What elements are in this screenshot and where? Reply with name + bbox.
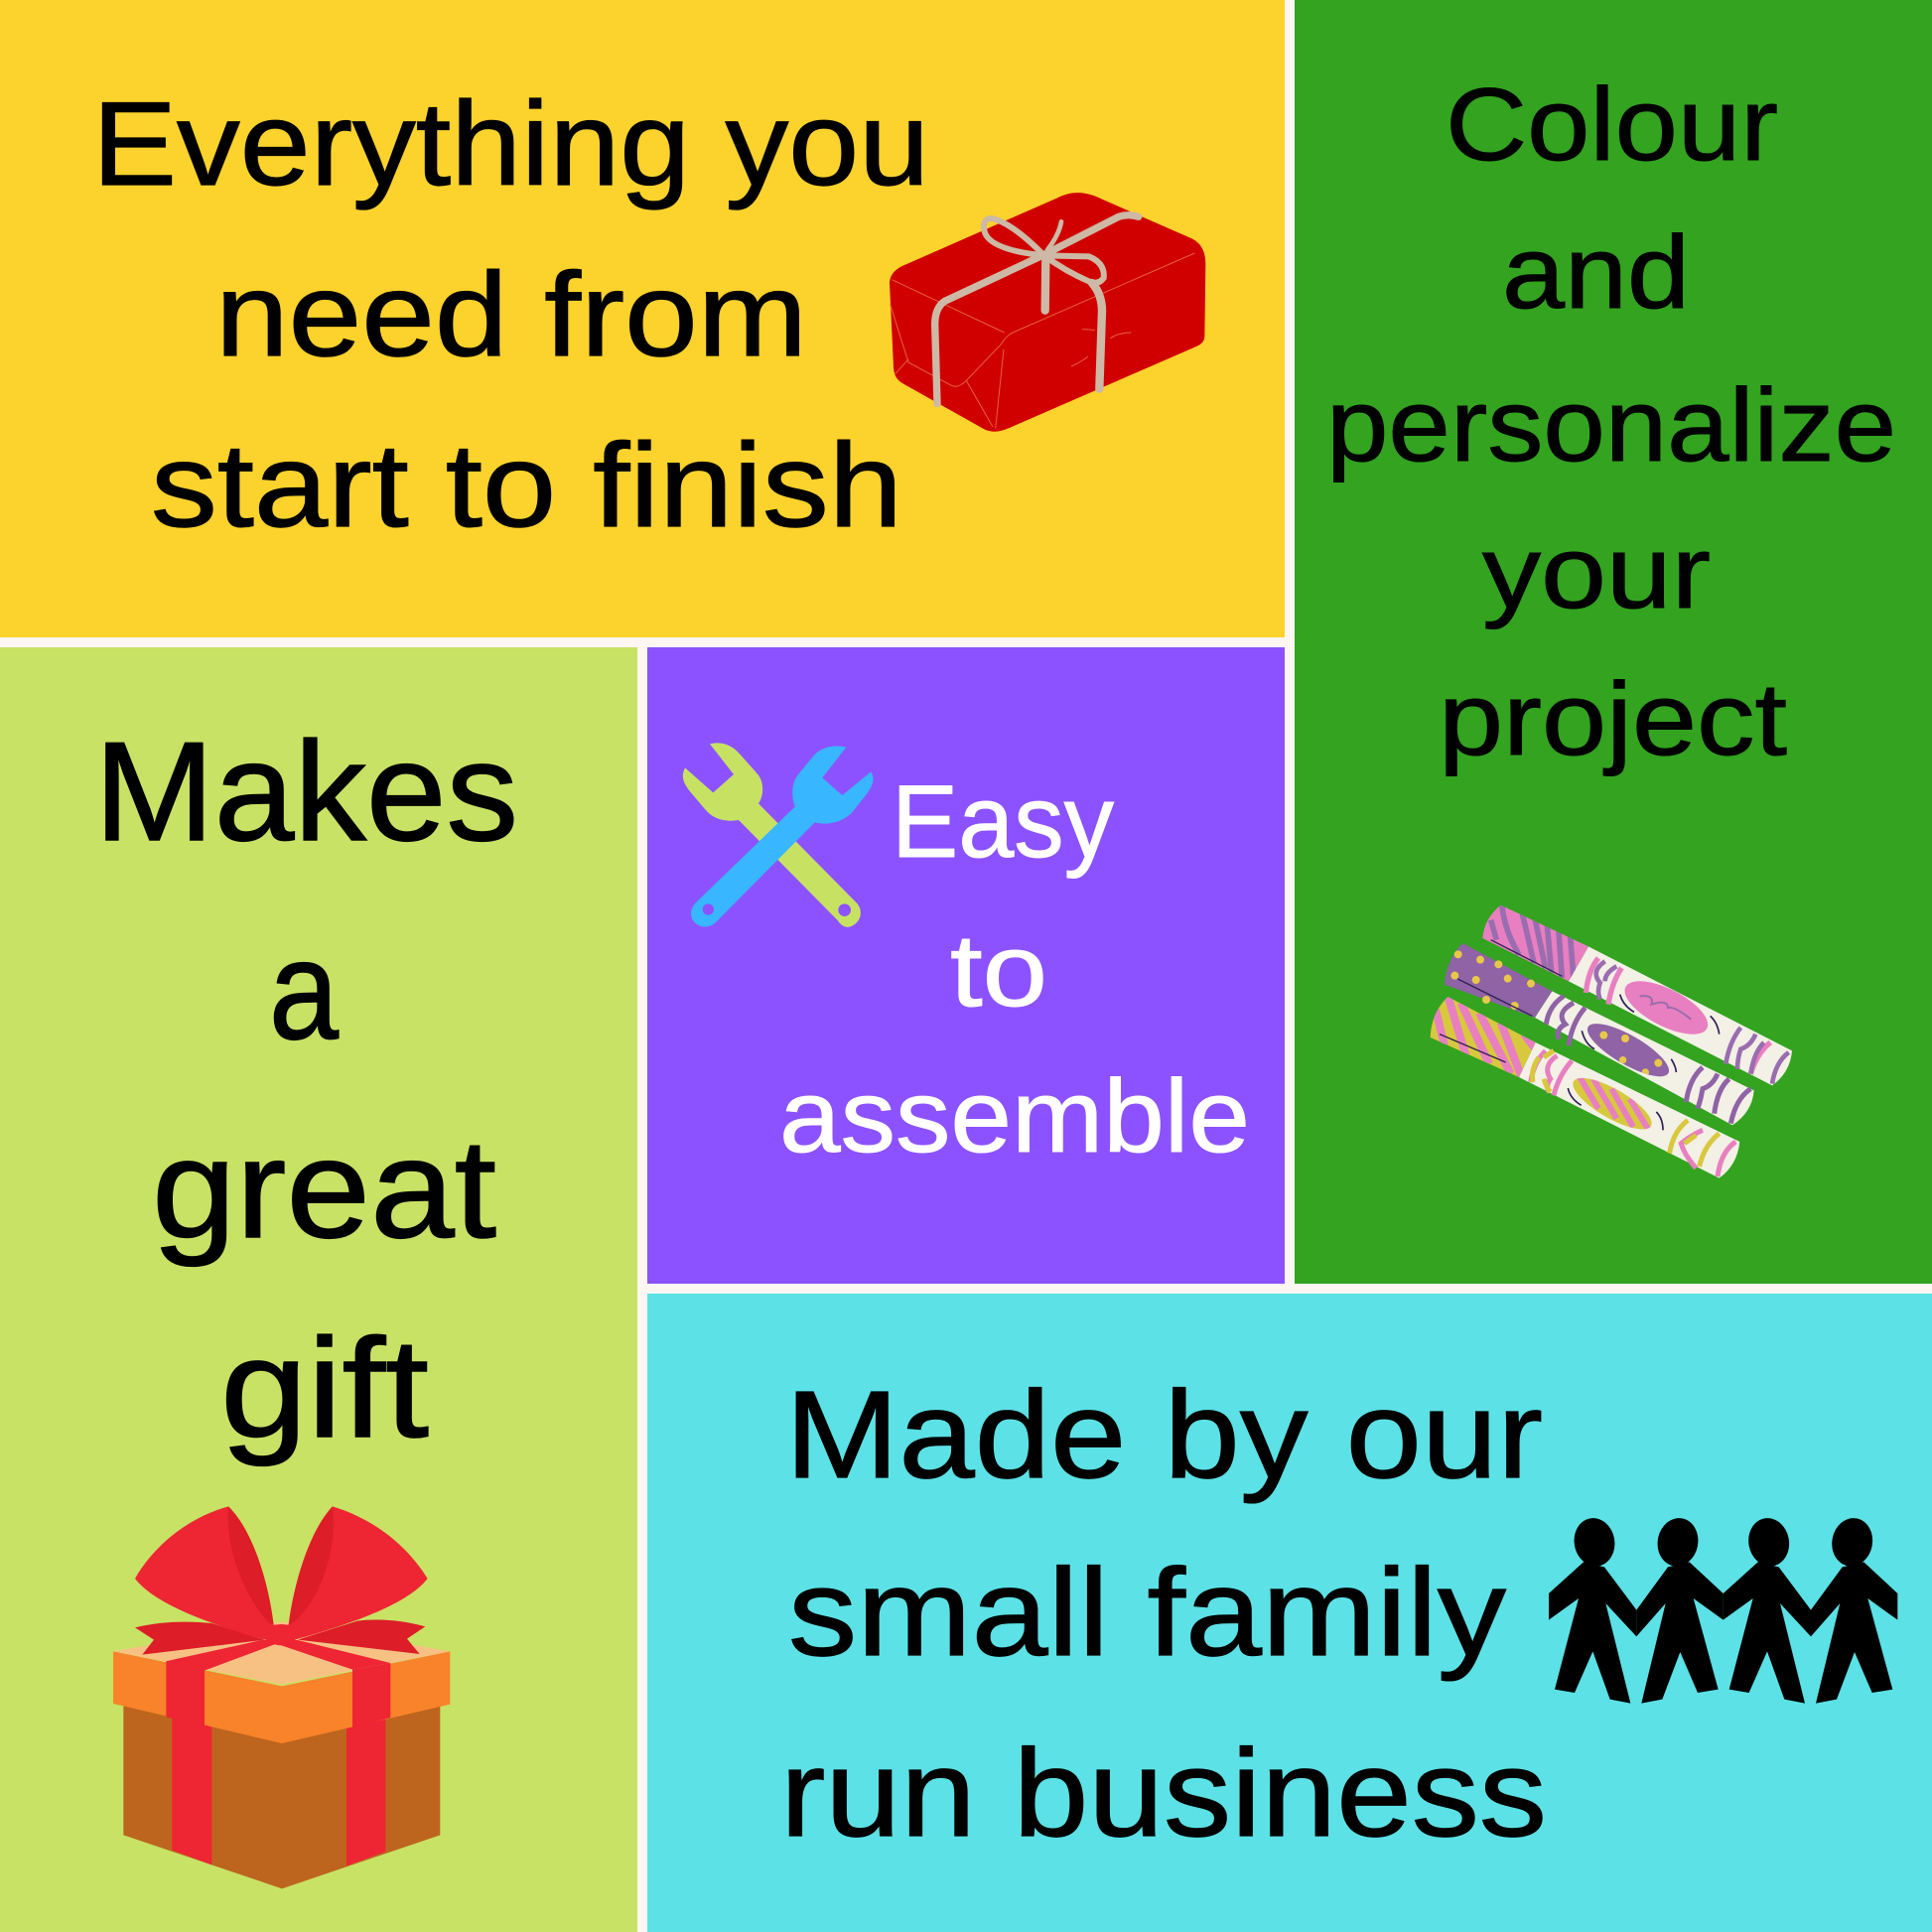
icon: red wrapped parcel xyxy=(890,193,1205,432)
heading: colour and personalize your project: and xyxy=(1502,215,1690,331)
heading: everything you need from start to finish: start to finish xyxy=(151,419,902,552)
heading: made by our small family run business: Made by our xyxy=(785,1366,1543,1504)
marker: pink xyxy=(1482,903,1792,1085)
panel: colour and personalize xyxy=(1295,0,1932,1284)
heading: makes a great gift: gift xyxy=(220,1310,429,1467)
heading: everything you need from start to finish: need from xyxy=(215,248,807,381)
icon: crossed wrenches xyxy=(683,743,874,927)
heading: made by our small family run business: run business xyxy=(780,1725,1547,1863)
heading: easy to assemble xyxy=(779,764,1250,1174)
heading: colour and personalize your project: project xyxy=(1439,662,1787,777)
heading: easy to assemble: assemble xyxy=(779,1059,1250,1174)
heading: colour and personalize your project: Colour xyxy=(1446,68,1778,183)
icon: paper-chain family of four xyxy=(1549,1515,1897,1704)
panel: makes a great gift xyxy=(0,647,637,1932)
panel: made by our small family xyxy=(647,1294,1932,1932)
heading: makes a great gift: Makes xyxy=(94,713,518,871)
heading: colour and personalize your project xyxy=(1326,68,1896,777)
heading: made by our small family run business xyxy=(780,1366,1547,1863)
icon: orange gift box with red bow xyxy=(113,1506,450,1888)
heading: colour and personalize your project: personalize xyxy=(1326,368,1896,483)
heading: makes a great gift: a xyxy=(269,911,339,1069)
wrench: yellow-green xyxy=(683,743,861,927)
panel: everything you need xyxy=(0,0,1285,637)
heading: makes a great gift: great xyxy=(152,1110,496,1268)
icon: three decorated markers xyxy=(1431,903,1792,1178)
marker: yellow and pink xyxy=(1431,996,1739,1178)
panel: easy to assemble xyxy=(647,647,1285,1284)
heading: colour and personalize your project: your xyxy=(1482,515,1711,630)
heading: made by our small family run business: small family xyxy=(788,1544,1507,1682)
heading: everything you need from start to finish: Everything you xyxy=(92,77,929,210)
wrench: blue xyxy=(691,746,874,926)
heading: makes a great gift xyxy=(94,713,518,1467)
heading: easy to assemble: Easy xyxy=(892,764,1114,880)
heading: everything you need from start to finish xyxy=(92,77,929,552)
heading: easy to assemble: to xyxy=(950,913,1047,1029)
marker: purple xyxy=(1445,943,1754,1125)
